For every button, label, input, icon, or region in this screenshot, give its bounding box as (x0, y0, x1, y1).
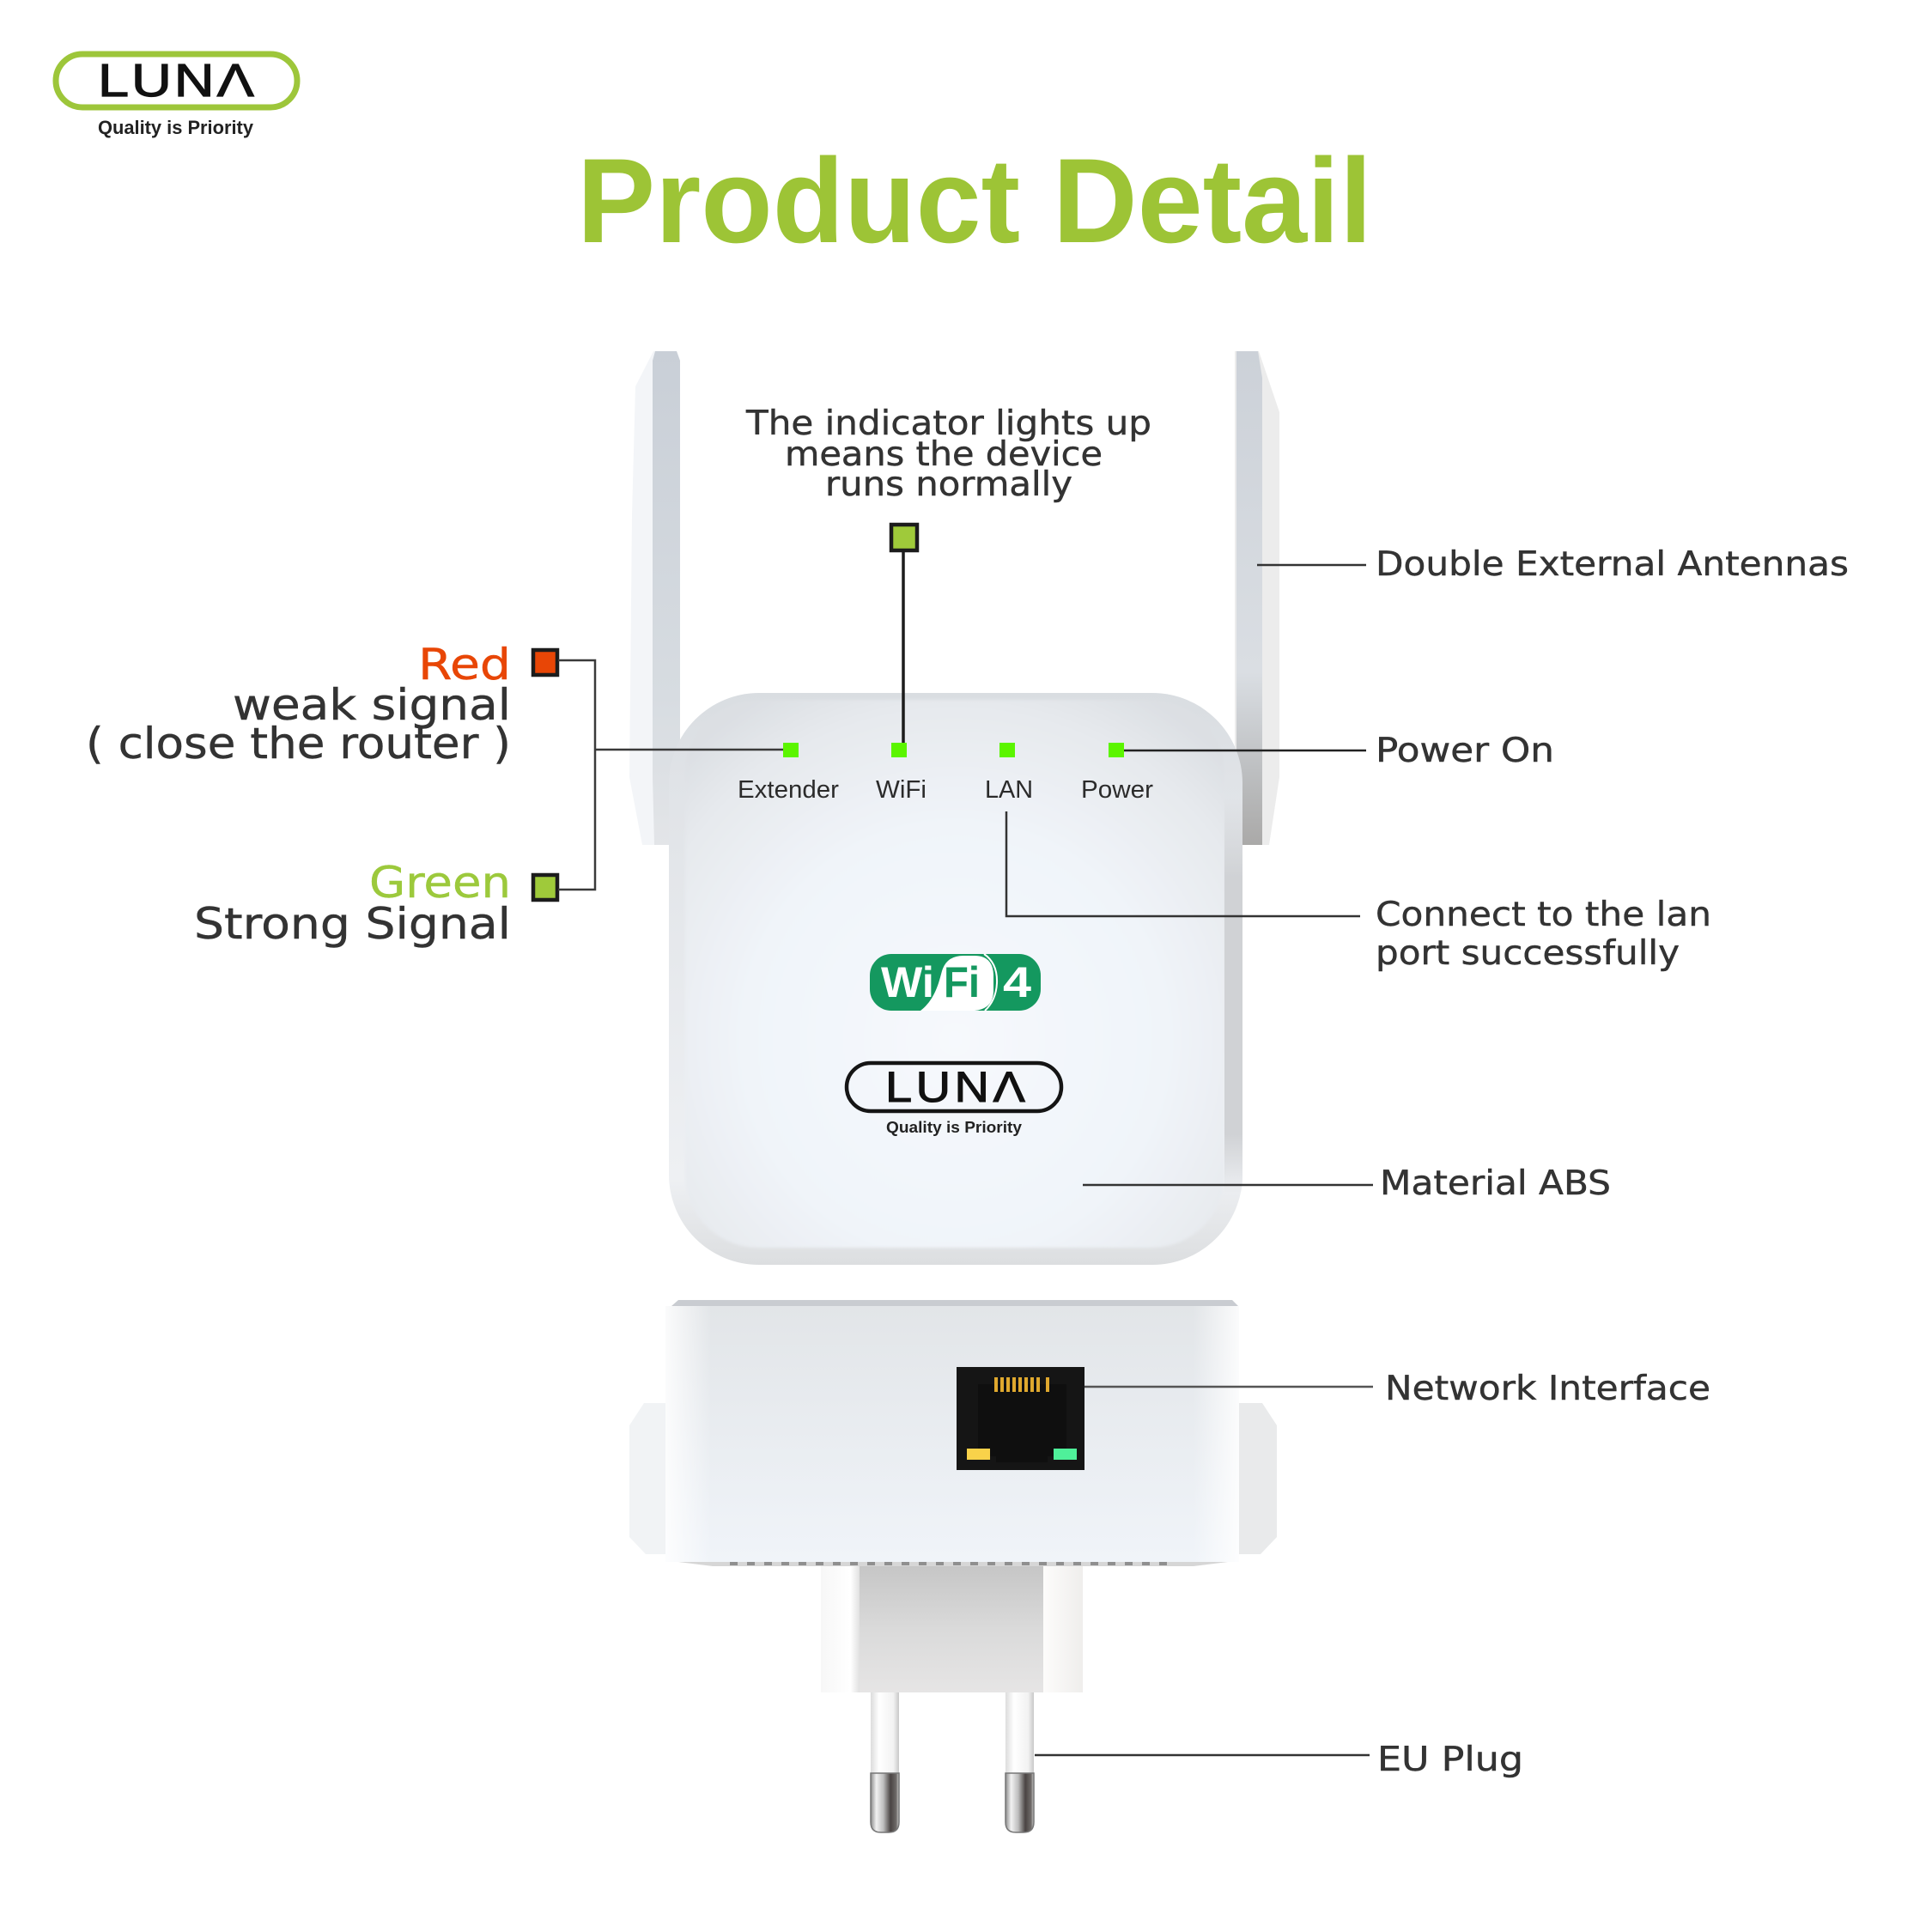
left plug pin (871, 1692, 899, 1832)
logo: LUNA Quality is Priority (56, 54, 297, 138)
main body (669, 693, 1242, 1265)
label: connect to LAN: Connect to the lan (1376, 896, 1711, 934)
label: network interface: Network Interface (1385, 1370, 1710, 1408)
badge: Wi-Fi 4: 4 (1003, 958, 1031, 1006)
EU plug body (821, 1566, 1083, 1692)
callout: green strong signal: Strong Signal (194, 899, 511, 949)
logo: LUNA Quality is Priority: LUNΛ (98, 54, 257, 106)
connector: LAN (1006, 811, 1360, 916)
connector: signal bracket to Extender LED (558, 660, 783, 890)
device logo (847, 1063, 1061, 1136)
device logo: LUNΛ (885, 1064, 1029, 1111)
device logo: Quality is Priority (886, 1119, 1022, 1136)
title: Product Detail (577, 133, 1372, 268)
connector: power (1124, 750, 1366, 751)
device: router front view (629, 351, 1279, 1265)
callout: indicator text: means the device (785, 435, 1103, 474)
connector: network (1084, 1386, 1373, 1388)
right plug pin (1005, 1692, 1034, 1832)
callout: indicator text (745, 404, 1151, 504)
label: Power: Power (1081, 776, 1153, 804)
logo: LUNA Quality is Priority: Quality is Priority (98, 117, 254, 138)
connector: antennas (1257, 564, 1366, 566)
callout: red weak signal (86, 640, 511, 769)
marker: green (533, 875, 557, 900)
callout: red weak signal: weak signal (233, 680, 511, 730)
callout: indicator text: runs normally (825, 465, 1072, 504)
label: EU plug: EU Plug (1377, 1741, 1523, 1779)
callout: red weak signal: Red (418, 640, 511, 690)
LED: Extender (783, 743, 799, 757)
connector: indicator marker to WiFi LED (891, 525, 917, 743)
label: antennas: Double External Antennas (1376, 545, 1849, 584)
label: connect to LAN (1376, 896, 1711, 973)
label: material ABS: Material ABS (1380, 1164, 1611, 1203)
marker: red (533, 650, 557, 675)
label: Extender: Extender (738, 776, 839, 804)
callout: green strong signal: Green (369, 858, 511, 908)
label: connect to LAN: port successfully (1376, 934, 1680, 973)
label: power on: Power On (1376, 732, 1554, 770)
lower body (665, 1300, 1239, 1566)
label: WiFi: WiFi (876, 776, 927, 804)
left side ear (629, 1403, 665, 1554)
device: lower view with network port and plug (629, 1300, 1277, 1832)
badge: Wi-Fi 4 (870, 954, 1041, 1011)
badge: Wi-Fi 4: Wi (881, 958, 934, 1006)
callout: green strong signal (194, 858, 511, 949)
port: RJ45 network (957, 1367, 1084, 1470)
right antenna (1235, 351, 1279, 845)
LED: LAN (999, 743, 1015, 757)
connector: material (1083, 1184, 1373, 1186)
LED: WiFi (891, 743, 907, 757)
callout: indicator text: The indicator lights up (745, 404, 1151, 443)
badge: Wi-Fi 4: Fi (944, 958, 980, 1006)
connector: EU plug (1035, 1754, 1370, 1756)
LED: Power (1109, 743, 1124, 757)
callout: red weak signal: ( close the router ) (86, 719, 511, 769)
right side ear (1239, 1403, 1277, 1554)
label: LAN: LAN (985, 776, 1033, 804)
left antenna (629, 351, 680, 845)
